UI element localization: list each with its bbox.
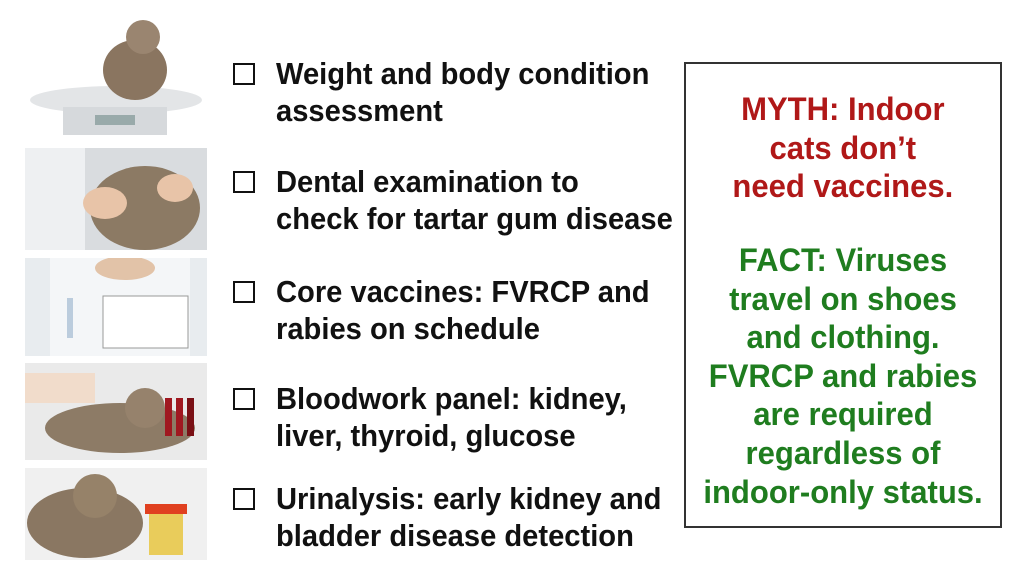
checklist item 4: Bloodwork panel: kidney, bbox=[276, 381, 627, 416]
checklist item 3 bbox=[233, 274, 650, 346]
fact text: are required bbox=[753, 396, 933, 432]
checklist item 4 bbox=[233, 381, 627, 453]
myth text: MYTH: Indoor bbox=[741, 91, 945, 127]
checklist item 1 bbox=[233, 56, 649, 128]
myth text bbox=[733, 91, 953, 204]
fact text: indoor-only status. bbox=[703, 474, 983, 510]
photo: cat on scale bbox=[25, 15, 207, 137]
photo: urinalysis bbox=[25, 468, 207, 560]
fact text: FVRCP and rabies bbox=[709, 358, 977, 394]
checklist item 5 bbox=[233, 481, 661, 553]
checklist item 5: bladder disease detection bbox=[276, 518, 634, 553]
fact text: regardless of bbox=[746, 435, 940, 471]
checklist item 5: Urinalysis: early kidney and bbox=[276, 481, 661, 516]
checklist item 1: assessment bbox=[276, 93, 443, 128]
fact text: FACT: Viruses bbox=[739, 242, 947, 278]
fact text bbox=[703, 242, 983, 510]
photo: bloodwork bbox=[25, 363, 207, 460]
fact text: and clothing. bbox=[746, 319, 940, 355]
panel: myth vs fact bbox=[684, 62, 1002, 528]
fact text: travel on shoes bbox=[729, 281, 957, 317]
myth text: need vaccines. bbox=[733, 168, 953, 204]
checklist item 3: rabies on schedule bbox=[276, 311, 540, 346]
checklist item 3: Core vaccines: FVRCP and bbox=[276, 274, 650, 309]
checklist item 4: liver, thyroid, glucose bbox=[276, 418, 576, 453]
photo: vaccine record bbox=[25, 258, 207, 356]
myth text: cats don’t bbox=[770, 130, 916, 166]
photo: dental exam bbox=[25, 148, 207, 250]
checklist item 2 bbox=[233, 164, 673, 236]
checklist item 2: Dental examination to bbox=[276, 164, 579, 199]
checklist item 1: Weight and body condition bbox=[276, 56, 649, 91]
checklist item 2: check for tartar gum disease bbox=[276, 201, 673, 236]
